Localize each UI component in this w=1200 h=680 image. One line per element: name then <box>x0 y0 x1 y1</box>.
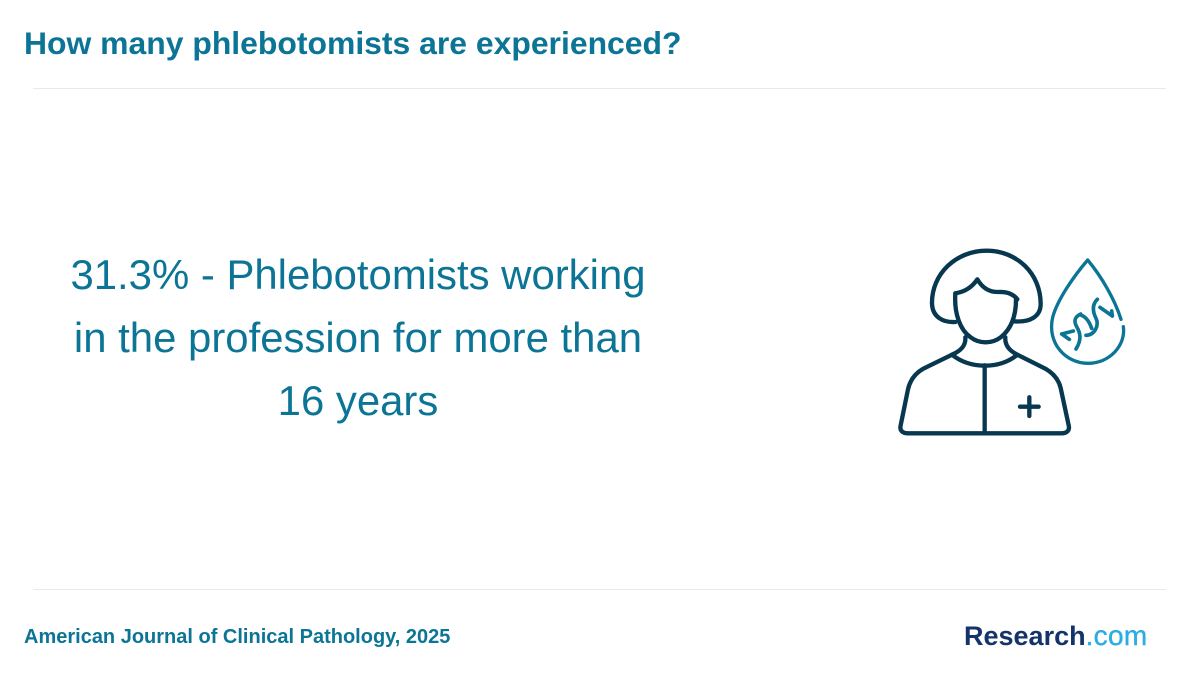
main statistic text: 31.3% - Phlebotomists working <box>70 251 646 298</box>
source citation: American Journal of Clinical Pathology, 2025 <box>24 626 450 648</box>
main statistic text: 16 years <box>278 377 438 424</box>
title: How many phlebotomists are experienced? <box>24 25 681 61</box>
main statistic text: in the profession for more than <box>74 314 642 361</box>
logo: Research.com: Research.com <box>964 620 1147 651</box>
icon: blood drop with DNA <box>1052 260 1124 363</box>
main statistic text <box>70 251 646 424</box>
icon: phlebotomist with blood drop <box>898 248 1126 436</box>
icon: person <box>900 251 1069 433</box>
